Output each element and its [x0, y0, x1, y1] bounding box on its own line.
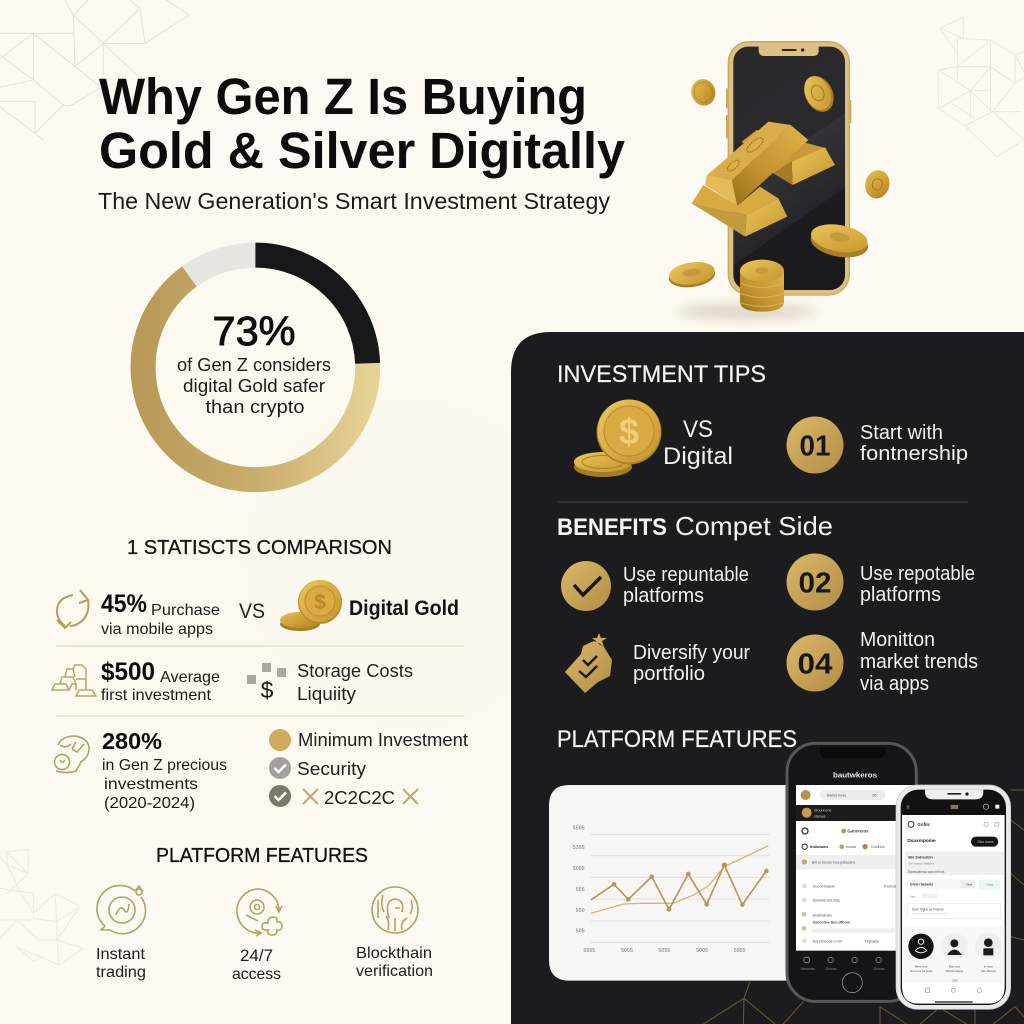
feature: 24/7 access — [232, 889, 282, 983]
black phone mockup: bautwkeros — [833, 771, 877, 780]
tip 02 — [786, 554, 975, 610]
tip 01: 01 — [800, 430, 830, 462]
top bar — [707, 122, 791, 181]
text: storage costs, liquidity: Storage Costs — [297, 661, 413, 681]
donut chart: 73%: digital Gold safer — [183, 376, 325, 396]
black phone mockup: Manonws — [801, 967, 815, 971]
heading: benefits compet side: BENEFITS — [557, 514, 667, 541]
line chart card: 5505 — [573, 825, 585, 831]
icon: gold coin pair: $ — [619, 411, 639, 452]
black phone mockup: Stounoons — [814, 809, 832, 813]
bullet: 2C2C2C: 2C2C2C — [324, 788, 395, 808]
black phone mockup: Tnonnd — [883, 884, 896, 888]
black phone mockup: Gnnoss — [873, 967, 885, 971]
line chart card: 5505 — [583, 948, 595, 954]
subtitle: The New Generation's Smart Investment Strategy — [98, 188, 610, 214]
white phone mockup: Grifils — [917, 822, 930, 827]
benefit: use reputable platforms: Use repuntable — [623, 564, 749, 586]
stat: 45% purchase via mobile apps — [57, 590, 220, 638]
icon: coin with cloud — [54, 736, 89, 772]
white phone mockup: Sorn rtlgun ar Frarsre — [912, 907, 944, 911]
black phone mockup: Snj.ssnnoas n rnrr — [813, 939, 843, 943]
panel: dark investment panel — [511, 332, 1024, 1024]
stat: 280% growth: 280% — [102, 728, 162, 754]
coins — [667, 71, 893, 312]
white phone mockup: Ssn.thnnvlt — [981, 969, 996, 973]
icon: dollar with squares: $ — [261, 677, 274, 703]
tip 02: Use repotable — [860, 563, 975, 585]
white phone mockup: 0: — [907, 805, 910, 810]
benefit: diversify your portfolio: portfolio — [633, 663, 705, 685]
black phone mockup: Indlotuan — [810, 844, 828, 849]
text: digital gold: Digital Gold — [349, 597, 459, 620]
icon: gold coins: $ — [314, 591, 326, 614]
tip 02: 02 — [798, 568, 832, 600]
white phone mockup: Dsaxmpome — [907, 838, 936, 844]
black phone mockup: Ssnoctwe Sun dthom — [813, 920, 851, 924]
text: VS digital — [663, 416, 733, 470]
line chart card: 5055 — [658, 948, 670, 954]
stat: 280% growth: in Gen Z precious — [102, 757, 227, 774]
stat: 280% growth — [54, 728, 227, 812]
white phone mockup: Gnrw rsaswrts — [910, 882, 933, 886]
tip 01: Start with — [860, 422, 943, 444]
bullet: security: Security — [297, 759, 366, 779]
feature: instant trading — [96, 885, 146, 981]
feature: 24/7 access: 24/7 — [240, 946, 273, 965]
tip 04 — [786, 629, 978, 695]
white phone mockup: Bin Srdnurbin - — [908, 856, 936, 860]
stat: $500 average first investment: first investment — [101, 687, 212, 704]
feature: instant trading: Instant — [96, 946, 146, 963]
line chart card: 5005 — [573, 866, 585, 872]
benefit: use reputable platforms: platforms — [623, 585, 704, 607]
icon: gold coins — [280, 580, 342, 631]
line chart card: 550 — [576, 908, 585, 914]
tip 01 — [786, 416, 968, 474]
stat: 280% growth: (2020-2024) — [104, 795, 195, 812]
tip 04: 04 — [798, 648, 832, 680]
donut chart: 73%: than crypto — [206, 397, 304, 417]
black phone mockup: Goont hoanrs — [813, 884, 835, 888]
tip 04: via apps — [860, 673, 929, 695]
benefit: use reputable platforms — [561, 561, 749, 611]
white phone mockup: Insn — [910, 894, 916, 898]
lower bar — [692, 185, 778, 215]
white phone mockup: In nsre — [984, 964, 993, 968]
feature: instant trading: trading — [96, 964, 146, 981]
black phone mockup: Inuida — [846, 845, 857, 849]
tip 04: Monitton — [860, 629, 935, 651]
heading: benefits compet side: Compet Side — [675, 511, 833, 541]
stat: 280% growth: investments — [104, 776, 198, 793]
icon: gold coin pair — [574, 400, 662, 477]
black phone mockup: Snohsdvars — [813, 914, 832, 918]
title: Gold & Silver Digitally — [99, 122, 626, 179]
title: Why Gen Z Is Buying — [99, 68, 587, 125]
VS label: VS — [239, 600, 265, 623]
heading: investment tips: INVESTMENT TIPS — [557, 361, 766, 388]
white phone mockup — [896, 785, 1011, 1009]
heading: statistics comparison: 1 STATISCTS COMPARISON — [127, 537, 392, 559]
bullet: minimum investment: Minimum Investment — [298, 730, 468, 750]
stat: 45% purchase via mobile apps: via mobile apps — [101, 621, 213, 638]
text: VS digital: Digital — [663, 443, 733, 470]
donut chart: 73%: 73% — [212, 308, 296, 354]
white phone mockup: Sn.vn nt ne prod — [910, 969, 932, 973]
black phone mockup: Snnwbs bot dnsj — [813, 898, 840, 902]
tip 02: platforms — [860, 584, 941, 606]
white phone mockup: Stor.mane — [977, 840, 994, 844]
title — [99, 68, 626, 179]
icon: dollar with squares — [247, 663, 286, 703]
black phone mockup: Bnt ol heuse hua pafaoane — [812, 860, 855, 864]
stat: 45% purchase via mobile apps: 45% — [101, 590, 147, 618]
white phone mockup: - Inca — [985, 882, 993, 886]
white phone mockup: Saneswbrws wan mhhns — [908, 870, 945, 874]
line chart card: 5355 — [573, 845, 585, 851]
line chart card: 5055 — [734, 948, 746, 954]
black phone mockup: Thpnasa — [865, 939, 880, 943]
black phone mockup: 65 — [872, 793, 876, 797]
feature: blockchain verification — [356, 887, 433, 980]
heading: platform features: PLATFORM FEATURES — [156, 845, 368, 867]
heading: benefits compet side — [557, 511, 833, 541]
white phone mockup: Tasa — [966, 882, 973, 886]
black phone mockup: Sanhd hnas — [827, 793, 846, 797]
feature: blockchain verification: Blockthain — [356, 945, 432, 962]
black phone mockup: Ganonsos — [847, 829, 869, 834]
line chart card: 5055 — [621, 948, 633, 954]
benefit: diversify your portfolio: Diversify your — [633, 642, 750, 664]
bullet: security — [269, 757, 366, 779]
hero illustration: gold phone with bars and coins — [667, 42, 893, 320]
right bar — [742, 130, 827, 173]
line chart card: 505 — [576, 887, 585, 893]
white phone mockup: Gls — [952, 979, 958, 983]
tip 04: market trends — [860, 651, 978, 673]
stat: $500 average first investment — [52, 658, 220, 704]
feature: blockchain verification: verification — [356, 963, 433, 980]
black phone mockup: Gnnoss — [825, 967, 837, 971]
text: storage costs, liquidity: Liquiity — [297, 684, 356, 704]
stat: 45% purchase via mobile apps: Purchase — [151, 602, 220, 619]
text: VS digital: VS — [683, 416, 713, 443]
line chart card — [549, 785, 793, 981]
line chart card: 505 — [576, 929, 585, 935]
donut chart: 73% — [143, 255, 368, 480]
feature: 24/7 access: access — [232, 966, 281, 983]
black phone mockup: slamas — [814, 814, 826, 818]
text: storage costs, liquidity — [297, 661, 413, 704]
white phone mockup: Tsn nsana nshthont — [908, 861, 934, 865]
donut chart: 73%: of Gen Z considers — [177, 355, 331, 375]
benefit: diversify your portfolio — [565, 633, 750, 693]
black phone mockup: Gnslnos — [871, 845, 885, 849]
bullet: 2C2C2C — [269, 785, 418, 808]
heading: platform features dark: PLATFORM FEATURES — [557, 726, 797, 753]
white phone mockup: Boo nsa — [949, 964, 960, 968]
black phone mockup — [787, 743, 916, 1001]
icon: gold bar pile — [52, 665, 96, 696]
white phone mockup: Rsne nsa — [915, 964, 928, 968]
icon: circular arrows — [57, 590, 88, 628]
comparison list — [269, 729, 468, 808]
tip 01: fontnership — [860, 443, 968, 465]
white phone mockup: Tonnd nlsane — [945, 969, 964, 973]
stat: $500 average first investment: $500 — [101, 658, 155, 686]
stat: $500 average first investment: Average — [160, 669, 220, 686]
line chart card: 5005 — [696, 948, 708, 954]
